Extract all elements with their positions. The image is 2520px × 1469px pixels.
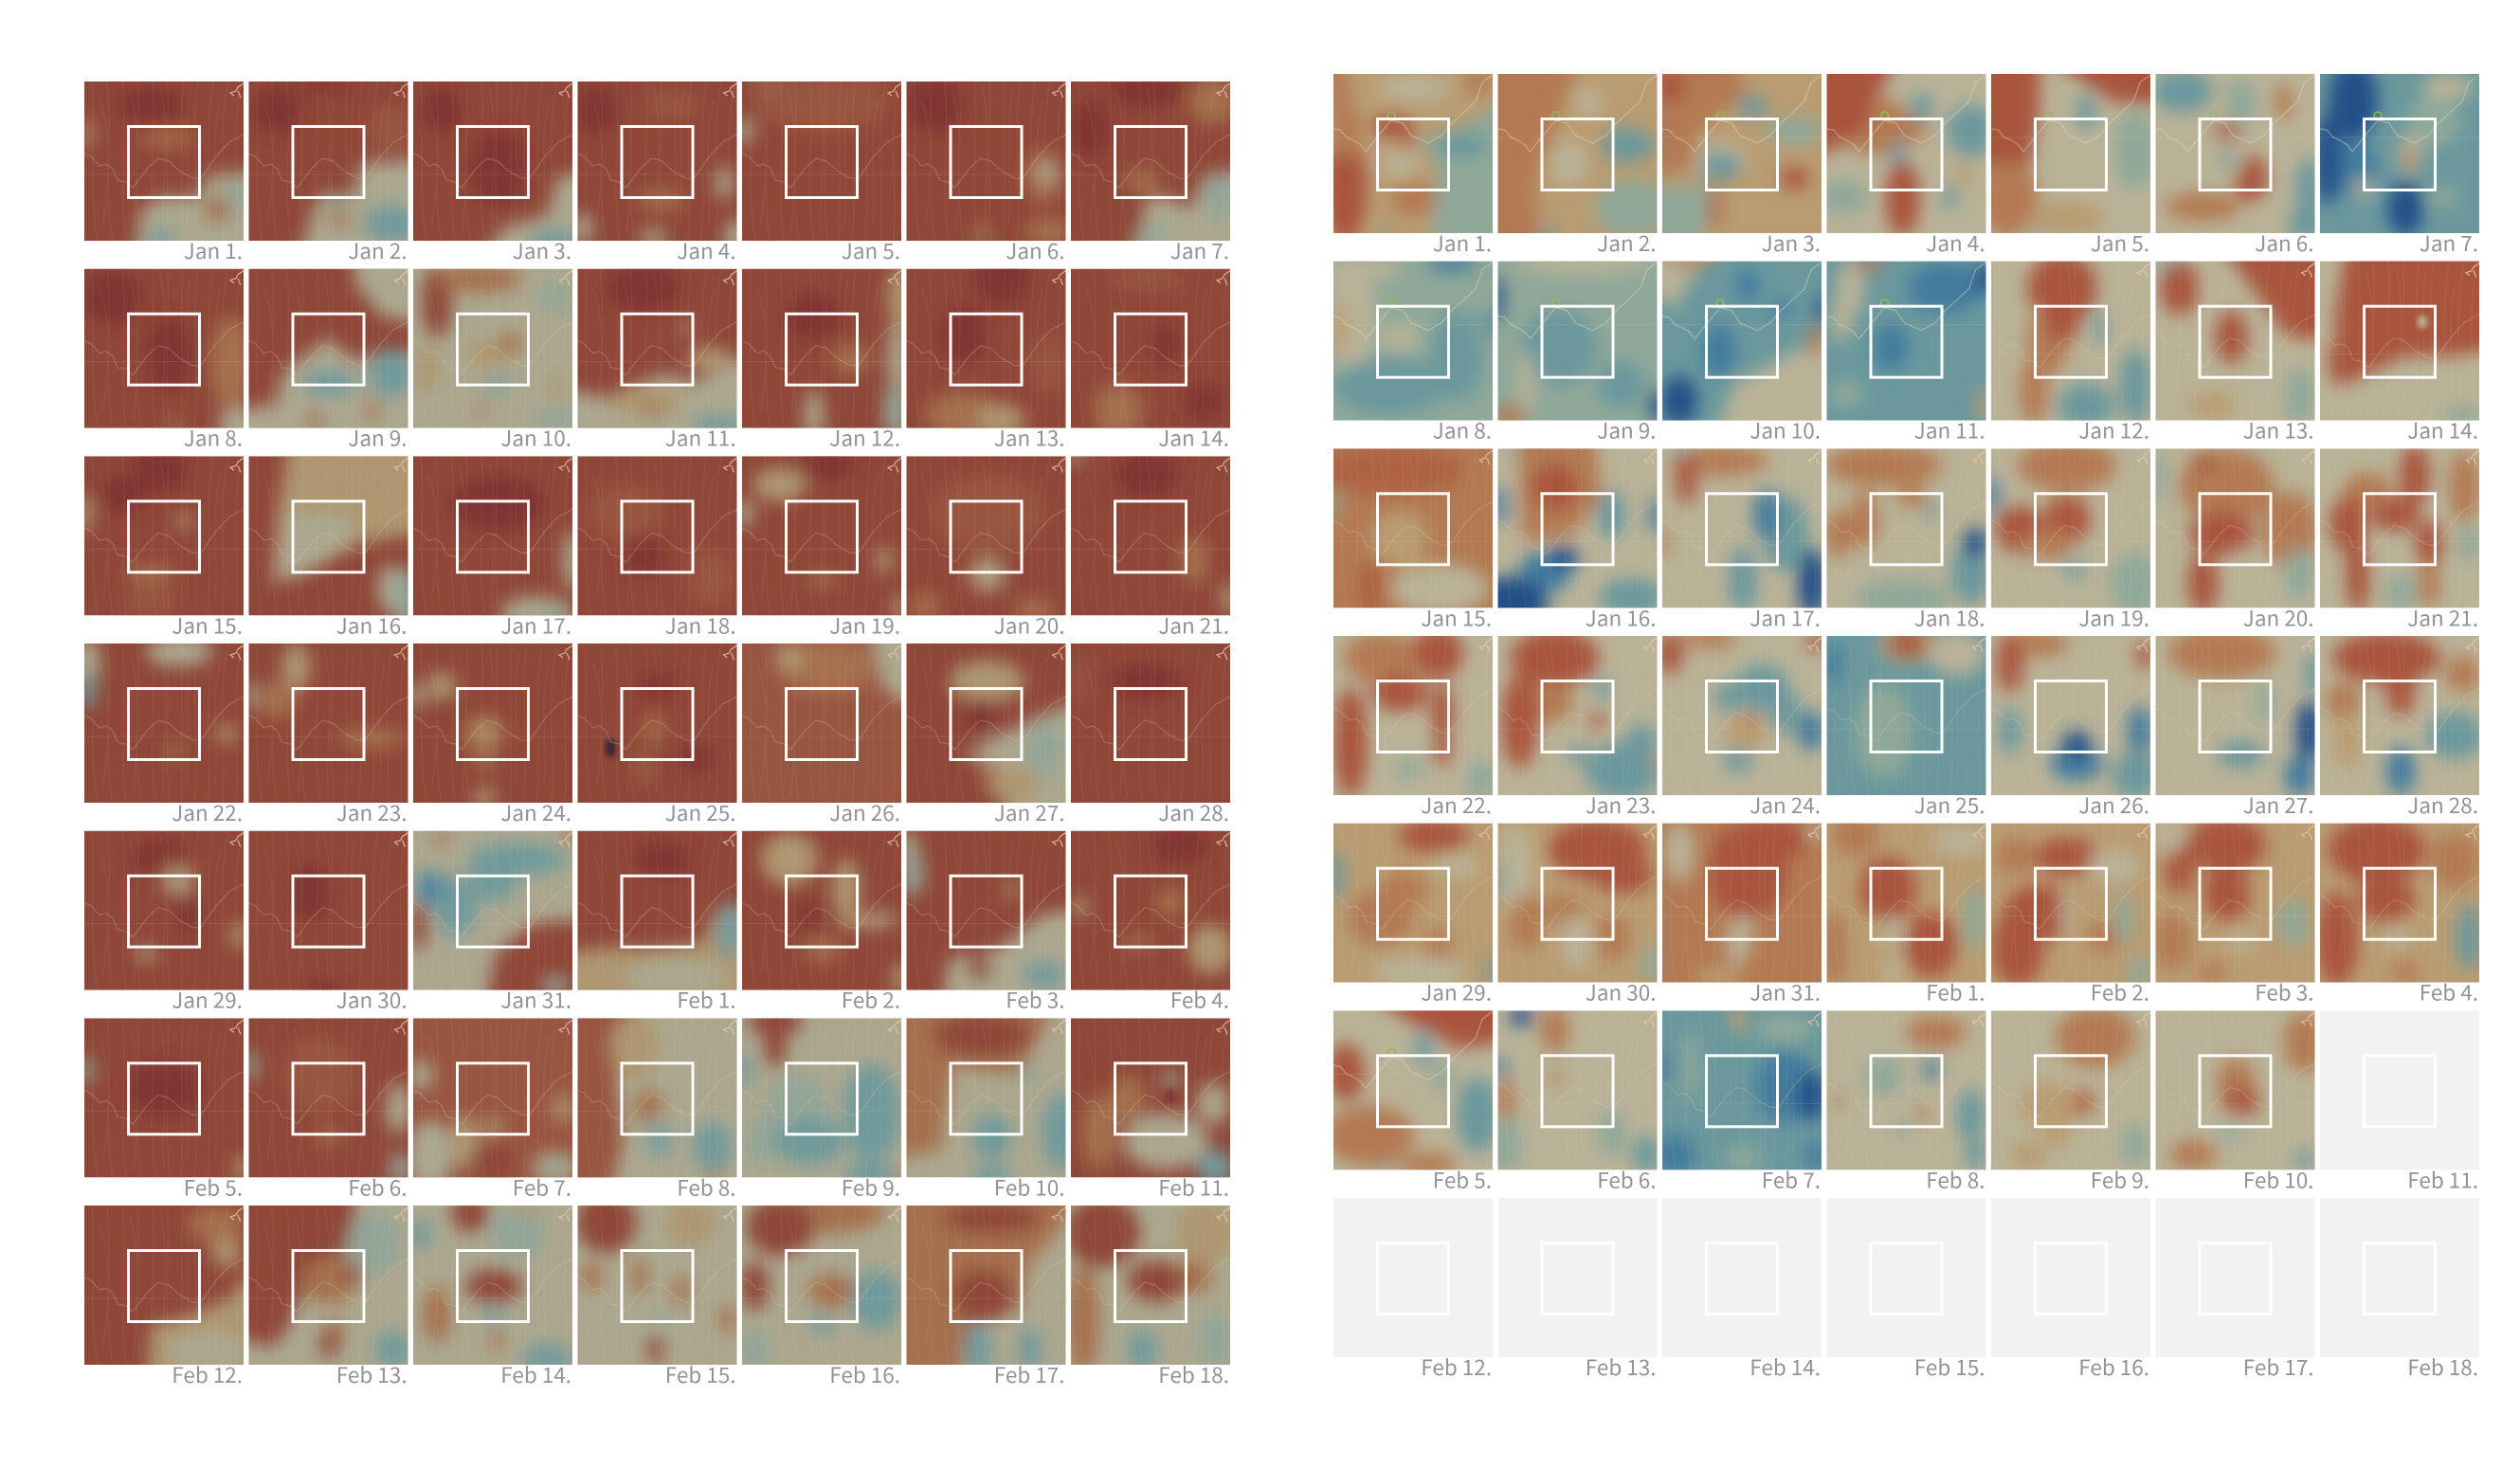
tile: Jan 28. left (1071, 644, 1230, 827)
tile: Jan 16. right (1473, 420, 1666, 632)
tile: Feb 3. left: Feb 3. (1006, 985, 1065, 1015)
tile: Jan 17. right (1657, 445, 1826, 632)
tile: Jan 11. left: Jan 11. (665, 423, 735, 453)
tile: Feb 16. left: Feb 16. (829, 1359, 900, 1389)
tile: Feb 1. right: Feb 1. (1926, 977, 1985, 1007)
tile: Jan 19. left: Jan 19. (829, 609, 900, 640)
tile: Feb 3. right (2151, 815, 2314, 1007)
tile: Jan 23. right: Jan 23. (1586, 789, 1657, 820)
tile: Jan 24. right (1657, 629, 1825, 820)
tile: Jan 8. right: Jan 8. (1433, 415, 1492, 445)
tile: Jan 18. left: Jan 18. (665, 609, 735, 640)
tile: Jan 6. left: Jan 6. (1006, 235, 1065, 265)
tile: Jan 3. left (413, 82, 572, 260)
tile: Jan 6. left (906, 79, 1073, 265)
tile: Jan 31. left (410, 827, 603, 1021)
tile: Feb 13. left (220, 1177, 411, 1389)
tile: Jan 16. right: Jan 16. (1586, 602, 1657, 632)
tile: Jan 13. right (2155, 233, 2345, 445)
tile: Jan 3. right (1634, 45, 1823, 263)
tile: Feb 15. empty (1827, 1198, 1986, 1382)
tile: Jan 19. left (742, 456, 901, 634)
tile: Jan 24. left: Jan 24. (500, 797, 571, 827)
tile: Jan 5. left: Jan 5. (842, 235, 900, 265)
tile: Jan 2. right: Jan 2. (1597, 227, 1657, 258)
tile: Feb 3. left (900, 831, 1096, 1021)
tile: Jan 7. right: Jan 7. (2420, 227, 2478, 258)
tile: Jan 21. right: Jan 21. (2407, 602, 2478, 632)
tile: Jan 9. right: Jan 9. (1597, 415, 1657, 445)
tile: Jan 5. right (1963, 45, 2181, 258)
tile: Feb 18. left (1064, 1197, 1236, 1389)
tile: Jan 22. left: Jan 22. (172, 797, 243, 827)
tile: Feb 14. left: Feb 14. (500, 1359, 571, 1389)
tile: Feb 10. left: Feb 10. (994, 1171, 1065, 1202)
tile: Jan 6. right (2151, 70, 2330, 258)
tile: Feb 2. right: Feb 2. (2091, 977, 2149, 1007)
tile: Jan 29. right (1329, 819, 1497, 1007)
tile: Jan 16. left (248, 456, 408, 634)
tile: Feb 6. right: Feb 6. (1597, 1164, 1657, 1194)
tile: Jan 4. left (578, 82, 737, 260)
tile: Feb 16. empty (1991, 1198, 2150, 1382)
tile: Jan 12. left (742, 269, 901, 446)
tile: Jan 5. right: Jan 5. (2091, 227, 2149, 258)
tile: Jan 12. left: Jan 12. (829, 423, 900, 453)
tile: Feb 7. left: Feb 7. (513, 1171, 571, 1202)
tile: Jan 11. right: Jan 11. (1914, 415, 1985, 445)
tile: Jan 1. left: Jan 1. (184, 235, 243, 265)
tile: Jan 26. left: Jan 26. (829, 797, 900, 827)
tile: Feb 5. right (1325, 982, 1523, 1194)
tile: Feb 11. left (1071, 1018, 1233, 1202)
tile: Jan 22. right: Jan 22. (1421, 789, 1492, 820)
tile: Jan 16. left: Jan 16. (336, 609, 408, 640)
tile: Jan 24. left (408, 644, 572, 827)
tile: Feb 15. empty: Feb 15. (1914, 1351, 1985, 1382)
panel: right map grid (1316, 45, 2510, 1382)
tile: Jan 9. left (248, 269, 408, 446)
tile: Jan 17. left: Jan 17. (500, 609, 571, 640)
tile: Jan 18. right: Jan 18. (1914, 602, 1985, 632)
tile: Feb 4. left: Feb 4. (1170, 985, 1229, 1015)
tile: Feb 14. left (410, 1194, 572, 1389)
tile: Feb 17. left (878, 1177, 1096, 1395)
tile: Jan 9. left: Jan 9. (348, 423, 408, 453)
tile: Feb 10. right: Feb 10. (2243, 1164, 2314, 1194)
tile: Feb 4. right (2316, 817, 2481, 1007)
tile: Feb 6. left (245, 1018, 411, 1202)
tile: Jan 23. left (245, 644, 408, 827)
tile: Feb 11. empty: Feb 11. (2407, 1164, 2478, 1194)
tile: Jan 30. right (1494, 820, 1662, 1007)
tile: Jan 2. left (248, 82, 408, 260)
tile: Jan 10. right: Jan 10. (1749, 415, 1821, 445)
tile: Feb 13. empty (1497, 1198, 1657, 1382)
tile: Feb 8. right: Feb 8. (1926, 1164, 1985, 1194)
tile: Jan 14. right: Jan 14. (2407, 415, 2478, 445)
tile: Feb 8. left: Feb 8. (677, 1171, 735, 1202)
tile: Jan 26. right: Jan 26. (2078, 789, 2149, 820)
tile: Jan 30. left: Jan 30. (336, 985, 408, 1015)
tile: Feb 18. left: Feb 18. (1158, 1359, 1229, 1389)
tile: Jan 29. left (84, 831, 246, 1015)
tile: Jan 17. left (413, 456, 582, 640)
tile: Feb 6. left: Feb 6. (348, 1171, 408, 1202)
tile: Jan 13. left (906, 269, 1065, 446)
tile: Feb 7. right (1654, 1004, 1826, 1194)
panel: left map grid (74, 67, 1260, 1395)
tile: Jan 1. right: Jan 1. (1433, 227, 1492, 258)
tile: Jan 1. right (1323, 61, 1523, 263)
tile: Jan 21. left: Jan 21. (1158, 609, 1229, 640)
tile: Feb 12. left (84, 1206, 274, 1395)
tile: Feb 11. left: Feb 11. (1158, 1171, 1229, 1202)
tile: Jan 25. left: Jan 25. (665, 797, 735, 827)
tile: Feb 15. left (576, 1192, 737, 1389)
tile: Jan 4. left: Jan 4. (677, 235, 735, 265)
tile: Feb 4. left (1071, 826, 1232, 1015)
tile: Jan 28. right: Jan 28. (2407, 789, 2478, 820)
tile: Jan 27. right: Jan 27. (2243, 789, 2314, 820)
tile: Jan 13. left: Jan 13. (994, 423, 1065, 453)
tile: Jan 29. right: Jan 29. (1421, 977, 1492, 1007)
tile: Jan 27. right (2155, 627, 2324, 820)
tile: Feb 13. left: Feb 13. (336, 1359, 408, 1389)
tile: Feb 1. left (550, 831, 768, 1021)
tile: Jan 25. left (578, 644, 737, 827)
tile: Jan 29. left: Jan 29. (172, 985, 243, 1015)
tile: Feb 3. right: Feb 3. (2255, 977, 2314, 1007)
tile: Jan 31. right (1662, 820, 1824, 1007)
tile: Feb 14. empty: Feb 14. (1749, 1351, 1821, 1382)
tile: Feb 12. empty (1333, 1198, 1493, 1382)
tile: Jan 1. left (84, 82, 244, 260)
tile: Jan 20. right: Jan 20. (2243, 602, 2314, 632)
tile: Feb 16. left (738, 1192, 901, 1389)
tile: Jan 17. right: Jan 17. (1749, 602, 1821, 632)
tile: Jan 10. left: Jan 10. (500, 423, 571, 453)
tile: Jan 2. right (1469, 45, 1670, 263)
tile: Jan 23. left: Jan 23. (336, 797, 408, 827)
tile: Feb 17. left: Feb 17. (994, 1359, 1065, 1389)
tile: Jan 2. left: Jan 2. (348, 235, 408, 265)
tile: Jan 8. left (84, 269, 244, 446)
tile: Jan 7. right (2314, 61, 2479, 258)
tile: Feb 17. empty (2155, 1198, 2314, 1382)
tile: Jan 20. right (2151, 448, 2318, 632)
tile: Jan 11. right (1827, 258, 1994, 445)
tile: Jan 14. right (2320, 233, 2510, 445)
tile: Feb 2. left (742, 831, 909, 1015)
tile: Jan 8. right (1322, 257, 1497, 445)
tile: Feb 7. right: Feb 7. (1762, 1164, 1821, 1194)
tile: Jan 31. left: Jan 31. (500, 985, 571, 1015)
tile: Feb 8. right (1827, 1010, 1986, 1194)
tile: Jan 10. left (413, 264, 579, 453)
tile: Jan 19. right (1985, 440, 2160, 632)
tile: Jan 23. right (1497, 629, 1660, 820)
tile: Jan 3. left: Jan 3. (513, 235, 571, 265)
tile: Feb 16. empty: Feb 16. (2078, 1351, 2149, 1382)
tile: Jan 26. left (742, 615, 932, 827)
tile: Feb 9. right (1991, 1007, 2150, 1194)
tile: Jan 28. left: Jan 28. (1158, 797, 1229, 827)
tile: Feb 6. right (1490, 1006, 1660, 1194)
tile: Jan 8. left: Jan 8. (184, 423, 243, 453)
tile: Feb 1. right (1822, 815, 1990, 1007)
tile: Jan 18. right (1823, 444, 1990, 632)
tile: Jan 20. left (906, 456, 1065, 640)
tile: Jan 12. right (1991, 253, 2151, 445)
tile: Jan 30. right: Jan 30. (1586, 977, 1657, 1007)
tile: Jan 30. left (248, 831, 408, 1015)
tile: Feb 17. empty: Feb 17. (2243, 1351, 2314, 1382)
tile: Jan 24. right: Jan 24. (1749, 789, 1821, 820)
tile: Jan 27. left (906, 644, 1096, 833)
tile: Feb 7. left (408, 1018, 578, 1202)
tile: Feb 2. right (1991, 824, 2152, 1007)
tile: Jan 18. left (578, 456, 737, 640)
tile: Jan 10. right (1634, 233, 1852, 451)
tile: Jan 15. right: Jan 15. (1421, 602, 1492, 632)
tile: Jan 21. left (1071, 456, 1230, 634)
tile: Feb 5. right: Feb 5. (1433, 1164, 1492, 1194)
tile: Feb 18. empty (2320, 1198, 2479, 1382)
tile: Jan 19. right: Jan 19. (2078, 602, 2149, 632)
tile: Feb 14. empty (1662, 1198, 1822, 1382)
tile: Jan 25. right (1825, 625, 1986, 820)
tile: Jan 7. left: Jan 7. (1170, 235, 1229, 265)
tile: Feb 10. right (2155, 1010, 2326, 1194)
tile: Jan 13. right: Jan 13. (2243, 415, 2314, 445)
tile: Jan 4. right (1799, 45, 1996, 258)
tile: Jan 7. left (1071, 82, 1230, 260)
tile: Feb 2. left: Feb 2. (842, 985, 900, 1015)
tile: Jan 27. left: Jan 27. (994, 797, 1065, 827)
tile: Feb 11. empty (2320, 1010, 2479, 1194)
tile: Feb 12. empty: Feb 12. (1421, 1351, 1492, 1382)
tile: Jan 15. left (84, 456, 244, 634)
tile: Jan 14. left (1071, 267, 1230, 453)
tile: Feb 5. left (80, 1018, 251, 1202)
tile: Jan 22. right (1333, 627, 1497, 820)
tile: Jan 11. left (578, 269, 737, 446)
tile: Feb 12. left: Feb 12. (172, 1359, 243, 1389)
tile: Feb 9. left (737, 1007, 906, 1202)
tile: Feb 1. left: Feb 1. (677, 985, 735, 1015)
tile: Jan 25. right: Jan 25. (1914, 789, 1985, 820)
tile: Feb 8. left (550, 989, 737, 1207)
tile: Feb 10. left (878, 989, 1080, 1202)
tile: Jan 21. right (2320, 444, 2479, 632)
tile: Jan 9. right (1492, 252, 1666, 445)
tile: Feb 18. empty: Feb 18. (2407, 1351, 2478, 1382)
tile: Jan 12. right: Jan 12. (2078, 415, 2149, 445)
tile: Jan 26. right (1991, 630, 2159, 820)
tile: Jan 15. right (1316, 444, 1493, 632)
tile: Jan 4. right: Jan 4. (1926, 227, 1985, 258)
tile: Jan 14. left: Jan 14. (1158, 423, 1229, 453)
tile: Jan 22. left (84, 644, 244, 821)
tile: Jan 5. left (742, 82, 901, 260)
tile: Jan 3. right: Jan 3. (1762, 227, 1821, 258)
tile: Jan 20. left: Jan 20. (994, 609, 1065, 640)
tile: Jan 31. right: Jan 31. (1749, 977, 1821, 1007)
tile: Jan 15. left: Jan 15. (172, 609, 243, 640)
tile: Jan 6. right: Jan 6. (2255, 227, 2314, 258)
tile: Jan 28. right (2320, 632, 2483, 820)
tile: Feb 5. left: Feb 5. (184, 1171, 243, 1202)
tile: Feb 9. right: Feb 9. (2091, 1164, 2149, 1194)
tile: Feb 4. right: Feb 4. (2420, 977, 2478, 1007)
tile: Feb 9. left: Feb 9. (842, 1171, 900, 1202)
tile: Feb 15. left: Feb 15. (665, 1359, 735, 1389)
tile: Feb 13. empty: Feb 13. (1586, 1351, 1657, 1382)
